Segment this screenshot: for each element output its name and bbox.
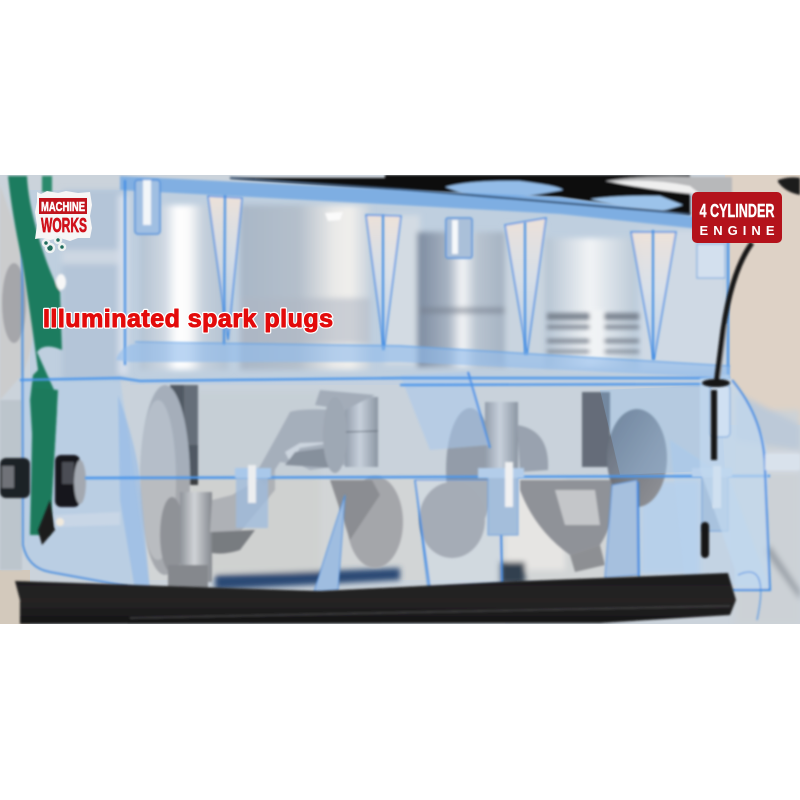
- logo plate: [35, 191, 92, 241]
- journal 3: [485, 402, 518, 474]
- blurry right shaft background: [738, 396, 800, 600]
- lower journal: [180, 492, 212, 582]
- black rod 1: [170, 385, 198, 485]
- lower crankcase background: [130, 385, 730, 580]
- cylinders: [140, 205, 725, 370]
- disc 3: [445, 408, 488, 518]
- black base: [15, 573, 736, 624]
- disc 2: [347, 476, 403, 568]
- badge box: [692, 192, 782, 243]
- logo word works: WORKS: [41, 215, 87, 237]
- blue tint on crankcase: [130, 380, 673, 478]
- triangular ribs: [208, 196, 676, 360]
- blue diagonal lower ribs: [314, 372, 770, 592]
- black rod 2: [582, 392, 610, 467]
- upper crank arm: [259, 408, 346, 473]
- crank web 3/4: [520, 480, 615, 555]
- horizontal seam: [20, 342, 770, 478]
- disc 1: [140, 385, 190, 575]
- left flywheel disc: [0, 185, 35, 570]
- top black cover: [230, 175, 732, 215]
- disc 4: [607, 409, 667, 507]
- blue transparent side plate left: [20, 250, 150, 586]
- crank web lower: [210, 470, 275, 532]
- beige wall right: [725, 175, 800, 425]
- crank mechanism: [140, 385, 667, 589]
- screw posts: [235, 462, 732, 535]
- upper journal: [345, 397, 378, 467]
- badge: 4 cylinder engine: [692, 192, 782, 243]
- top stud posts: [135, 180, 725, 278]
- spark plug wire: [701, 177, 800, 558]
- green belt: [8, 176, 66, 535]
- left inner panel shading: [62, 190, 128, 380]
- right end bell: [700, 375, 800, 620]
- belt pulley shaft: [0, 455, 120, 545]
- piston rings: [547, 310, 639, 360]
- caption: Illuminated spark plugs: Illuminated spark plugs: [43, 305, 333, 333]
- logo gear: [43, 237, 65, 252]
- blue top rail: [120, 176, 728, 232]
- cylinder block upper tint: [30, 190, 730, 380]
- logo word machine: MACHINE: [41, 199, 85, 214]
- photo: transparent engine model: [0, 175, 800, 625]
- logo: Machine Works: [35, 191, 92, 252]
- logo red box: [39, 198, 87, 214]
- backdrop: [0, 175, 800, 624]
- badge line 2: ENGINE: [700, 223, 775, 238]
- caption: Illuminated spark plugs: Illuminated spark plugs: [43, 305, 333, 333]
